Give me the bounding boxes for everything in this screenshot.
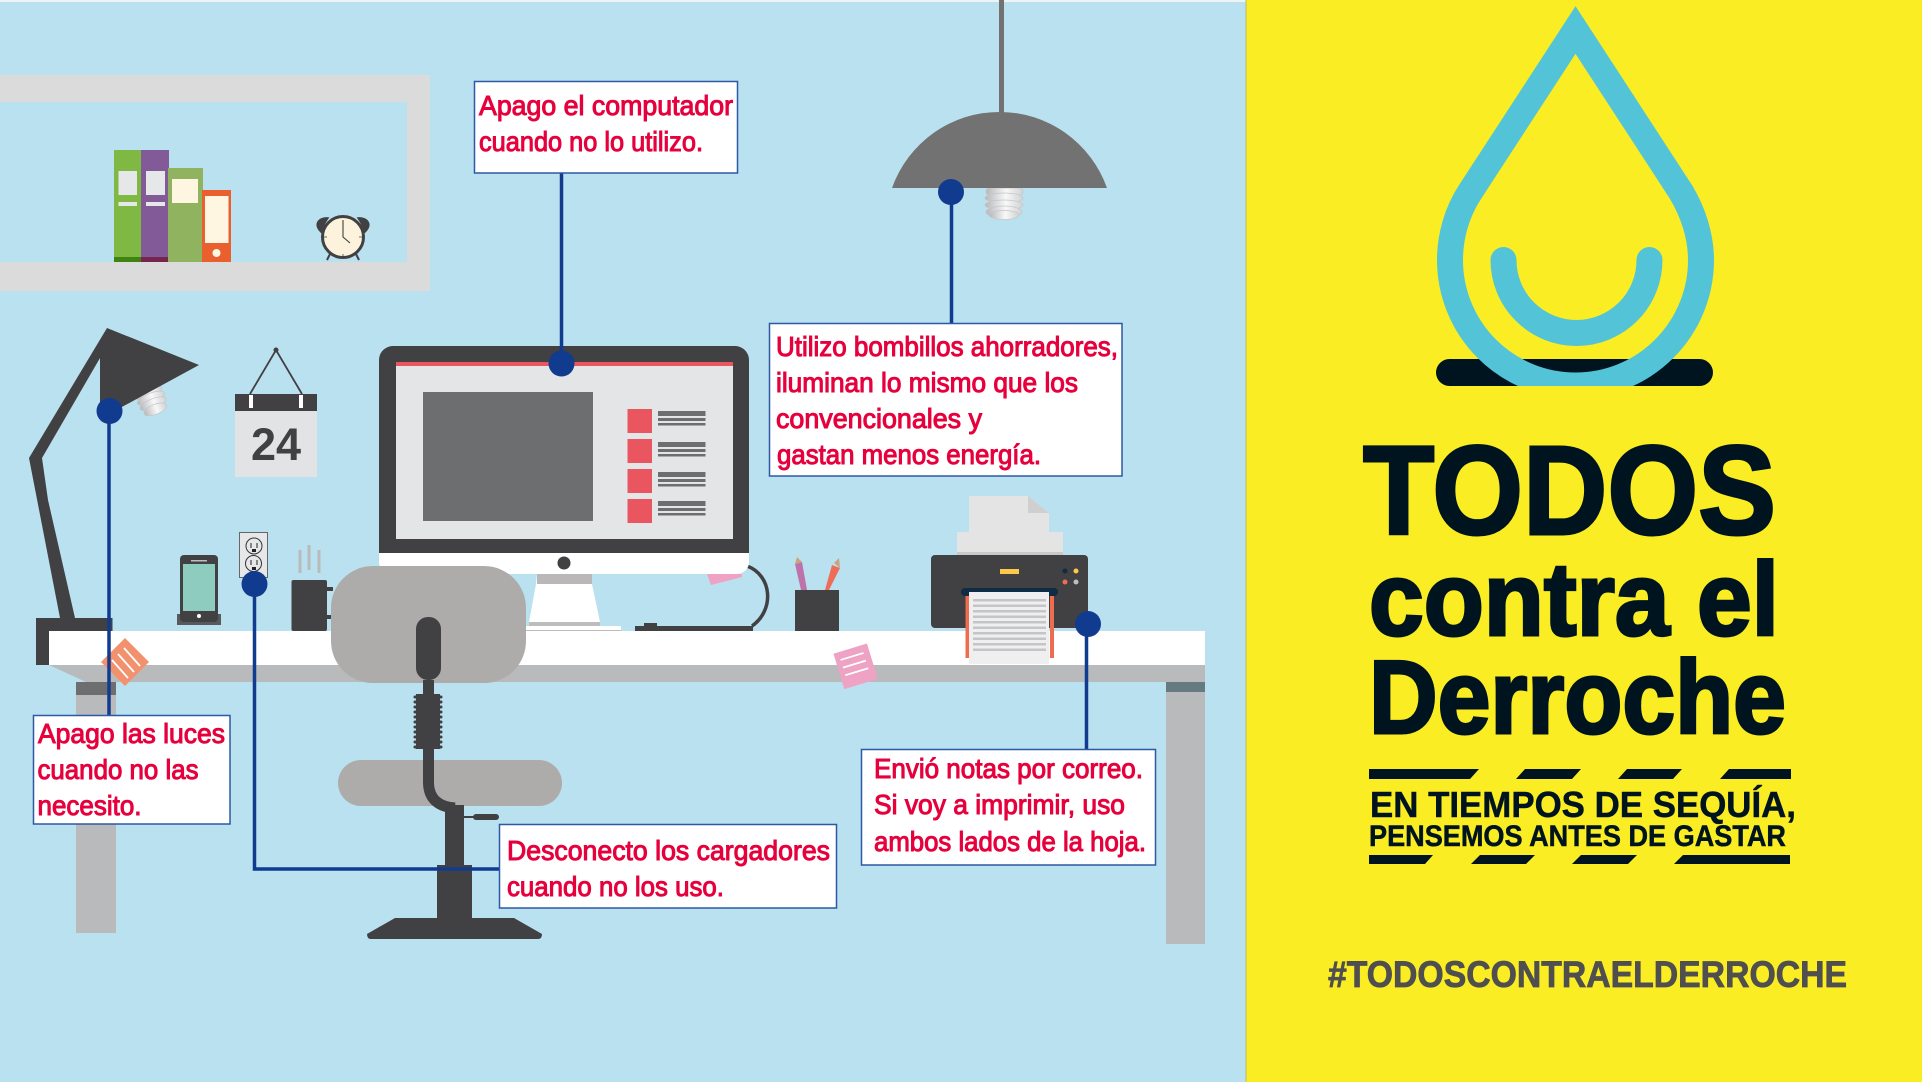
icon: wall calendar: 24 bbox=[251, 419, 301, 470]
icon: pink sticky note bbox=[833, 644, 878, 689]
subtitle with hazard stripes bbox=[1369, 769, 1796, 864]
callout: bulbs: gastan menos energía. bbox=[777, 439, 1041, 470]
callout: lights: cuando no las bbox=[38, 754, 198, 785]
icon: orange sticky note bbox=[101, 638, 149, 686]
icon: printer bbox=[931, 496, 1088, 664]
callout: bulbs: iluminan lo mismo que los bbox=[776, 367, 1078, 398]
connector: computer bbox=[548, 173, 574, 376]
callout: computer bbox=[474, 82, 738, 173]
title: contra el bbox=[1369, 542, 1779, 658]
callout: bulbs bbox=[770, 324, 1122, 476]
icon: ceiling lamp bbox=[892, 0, 1107, 220]
callout: computer: Apago el computador bbox=[479, 90, 733, 121]
connector: chargers bbox=[242, 571, 500, 869]
callout: chargers: Desconecto los cargadores bbox=[507, 835, 830, 866]
panel: office scene bbox=[0, 0, 1246, 1082]
title: TODOS bbox=[1363, 420, 1776, 561]
connector: printer bbox=[1075, 611, 1101, 750]
title bbox=[1363, 420, 1786, 756]
icon: wall outlet bbox=[240, 532, 268, 578]
icon: phone on dock bbox=[177, 555, 221, 625]
icon: binders bbox=[114, 150, 231, 262]
icon: alarm clock bbox=[317, 216, 369, 260]
callout: chargers: cuando no los uso. bbox=[507, 871, 724, 902]
callout: paper: Si voy a imprimir, uso bbox=[874, 789, 1125, 820]
subtitle with hazard stripes: PENSEMOS ANTES DE GASTAR bbox=[1369, 820, 1786, 853]
hashtag: #TODOSCONTRAELDERROCHE bbox=[1328, 954, 1847, 995]
callout: paper: ambos lados de la hoja. bbox=[874, 826, 1146, 857]
icon: pencil cup bbox=[795, 557, 840, 631]
connector: lights bbox=[96, 398, 122, 716]
callout: bulbs: convencionales y bbox=[776, 403, 982, 434]
callout: paper: Envió notas por correo. bbox=[874, 753, 1143, 784]
callout: paper bbox=[862, 750, 1156, 865]
desk bbox=[49, 631, 1205, 944]
connector: bulb bbox=[938, 179, 964, 324]
title: Derroche bbox=[1369, 640, 1786, 756]
icon: wall calendar bbox=[235, 348, 317, 477]
callout: lights: Apago las luces bbox=[38, 718, 225, 749]
icon: water drop logo bbox=[1436, 30, 1713, 386]
panel: campaign bbox=[1246, 0, 1922, 1082]
callout: bulbs: Utilizo bombillos ahorradores, bbox=[776, 331, 1118, 362]
callout: chargers bbox=[500, 824, 836, 908]
callout: lights bbox=[34, 716, 230, 824]
subtitle with hazard stripes: EN TIEMPOS DE SEQUÍA, bbox=[1370, 784, 1796, 825]
callout: computer: cuando no lo utilizo. bbox=[479, 126, 703, 157]
icon: office chair bbox=[331, 566, 562, 939]
icon: desk lamp bbox=[29, 328, 199, 665]
callout: lights: necesito. bbox=[38, 790, 142, 821]
icon: computer monitor bbox=[379, 346, 768, 632]
wall shelf bbox=[0, 75, 430, 291]
icon: coffee mug bbox=[292, 545, 333, 631]
